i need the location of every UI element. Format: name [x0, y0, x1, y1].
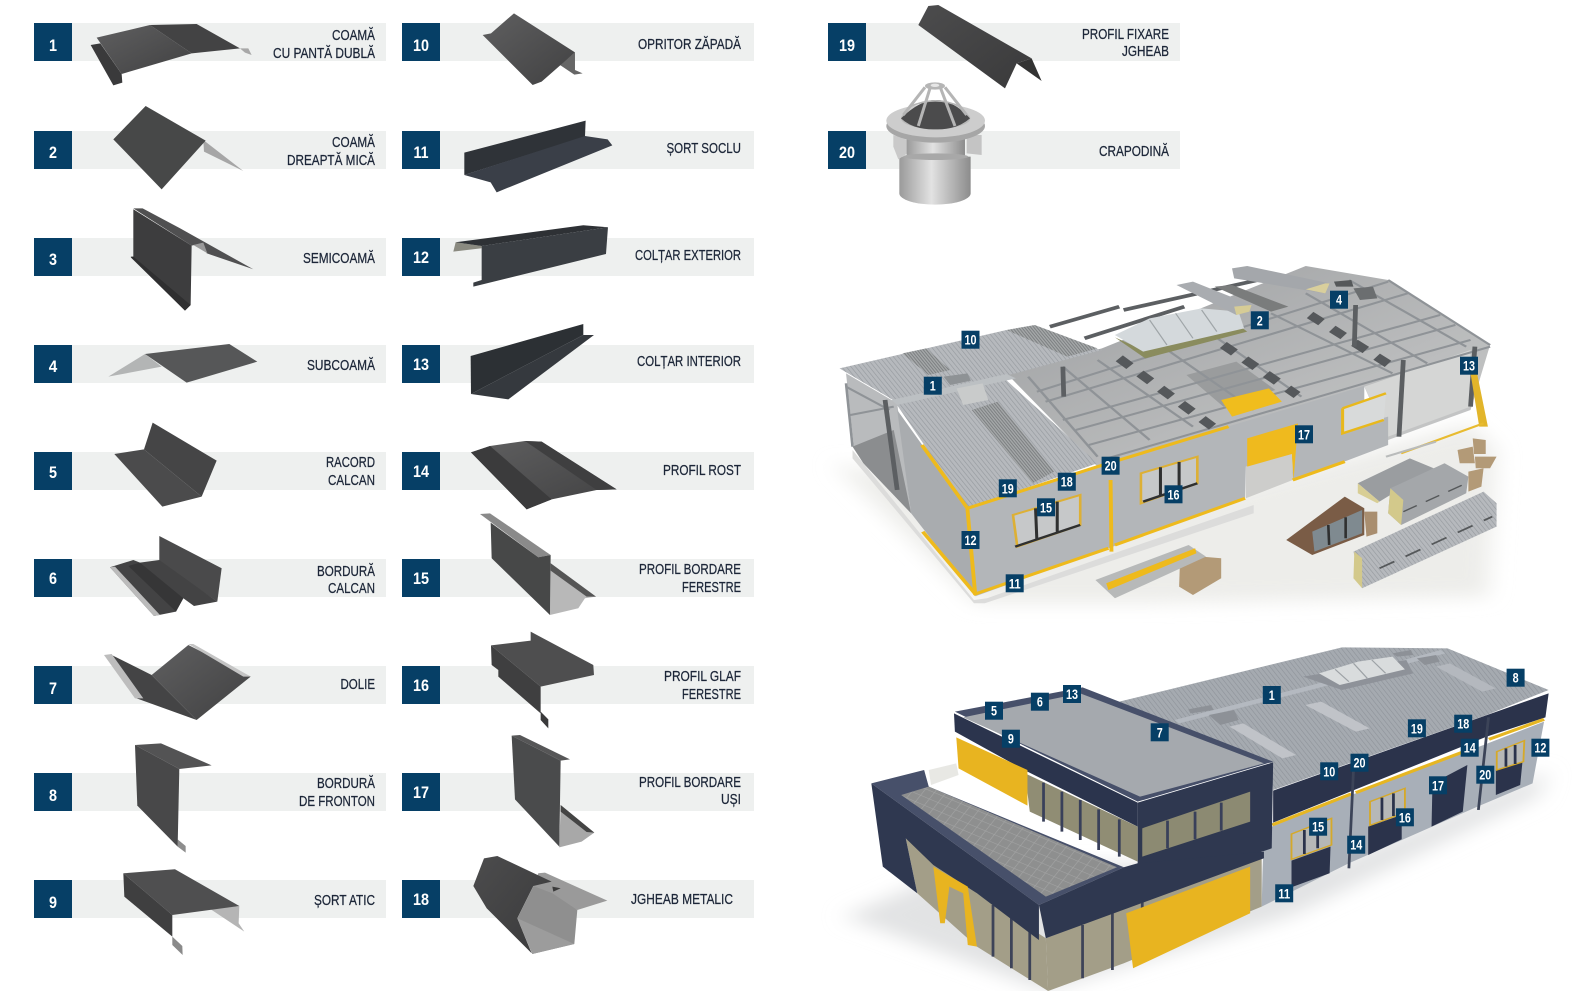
building 2 number badges: 19: [1411, 720, 1423, 736]
row 8: bordură de fronton: [34, 743, 386, 853]
building 1 number badges: 10: [964, 332, 977, 348]
badge 3: [34, 238, 72, 276]
building 2 number badges: 13: [1066, 686, 1078, 702]
icon 3: [131, 208, 253, 311]
icon 20: [886, 82, 985, 205]
badge 4: 4: [49, 358, 58, 376]
icon 12: [453, 225, 608, 287]
building 1 number badges: [924, 291, 1478, 592]
row 12: colțar exterior: [402, 225, 754, 287]
icon 15: [480, 513, 596, 615]
badge 5: [34, 452, 72, 490]
icon 8: [135, 743, 212, 853]
badge 18: 18: [413, 891, 429, 909]
building 1 number badges: 17: [1298, 426, 1310, 442]
building 2 number badges: 1: [1269, 687, 1275, 703]
badge 2: 2: [49, 144, 57, 162]
badge 13: 13: [413, 356, 429, 374]
label 15: [639, 562, 741, 596]
badge 14: [402, 452, 440, 490]
wall windows: [1291, 741, 1524, 859]
label 8: [299, 775, 375, 810]
label 18: JGHEAB METALIC: [631, 892, 733, 908]
building 1 number badges: 2: [1257, 312, 1263, 328]
building 2 number badges: 16: [1399, 809, 1411, 825]
label 15: PROFIL BORDARE: [639, 562, 741, 578]
label 3: SEMICOAMĂ: [303, 250, 375, 267]
building 1 number badges: 19: [1002, 480, 1014, 496]
label 5: [326, 455, 375, 489]
building 2: finished building with dark and yellow cladding: [844, 647, 1549, 991]
icon 16: [491, 632, 594, 728]
badge 16: 16: [413, 677, 429, 695]
materials: framed windows: [1286, 497, 1377, 555]
window opening with yellow sill: [1343, 393, 1386, 433]
badge 9: 9: [49, 894, 57, 912]
building 1 number badges: 13: [1463, 358, 1475, 374]
row 15: profil bordare ferestre: [402, 513, 754, 615]
roof skylight: [1303, 657, 1413, 690]
building 2 number badges: 12: [1534, 740, 1547, 756]
rear roof: [1119, 647, 1549, 790]
large yellow panel: [1126, 867, 1250, 968]
badge 17: 17: [413, 784, 429, 802]
dark door and window panels: [1291, 762, 1522, 887]
terrace railing: [881, 763, 959, 795]
row 18: jgheab metalic: [402, 856, 754, 954]
icon 18: [473, 856, 607, 954]
yellow wall trim: [922, 427, 1345, 595]
icon 2: [113, 106, 243, 189]
icon 14: [471, 441, 617, 509]
badge 1: 1: [49, 37, 57, 55]
row 7: dolie: [34, 644, 386, 720]
label 6: BORDURĂ: [317, 563, 375, 580]
label 8: BORDURĂ: [317, 775, 375, 792]
row 3: semicoamă: [34, 208, 386, 311]
materials: cardboard boxes: [1179, 438, 1497, 595]
building 2 number badges: [985, 669, 1549, 902]
icon 6: [110, 536, 222, 616]
label 6: [317, 563, 375, 597]
label 9: ȘORT ATIC: [314, 893, 375, 909]
icon 17: [512, 735, 594, 847]
downpipes: [1349, 717, 1488, 868]
label 1: CU PANTĂ DUBLĂ: [273, 45, 375, 62]
garage door: [1247, 423, 1298, 480]
badge 10: 10: [413, 37, 429, 55]
icon 7: [104, 644, 251, 720]
building 2 number badges: 14: [1350, 837, 1362, 853]
badge 20: 20: [839, 144, 855, 162]
label 1: [273, 27, 375, 62]
badge 11: 11: [414, 144, 428, 162]
label 19: [1082, 27, 1169, 60]
roof panels with ribs: [840, 325, 1102, 508]
upper volume: [954, 687, 1273, 893]
building 2 number badges: 18: [1457, 716, 1469, 732]
icon 1: [91, 24, 252, 85]
badge 3: 3: [49, 251, 57, 269]
label 5: RACORD: [326, 455, 375, 471]
label 10: OPRITOR ZĂPADĂ: [638, 36, 741, 53]
building 2 number badges: 9: [1008, 731, 1014, 747]
ground-floor glazing: [906, 838, 1262, 991]
roof vents: [1188, 650, 1440, 725]
icon 5: [114, 423, 217, 507]
badge 19: 19: [839, 37, 855, 55]
icon 11: [464, 121, 612, 192]
icon 4: [108, 344, 257, 383]
label 16: FERESTRE: [682, 687, 741, 703]
building 1 number badges: 20: [1105, 458, 1117, 474]
label 2: DREAPTĂ MICĂ: [287, 152, 375, 169]
badge 14: 14: [413, 463, 430, 481]
label 17: [639, 775, 741, 808]
badge 7: 7: [49, 680, 57, 698]
icon 13: [471, 324, 594, 399]
label 15: FERESTRE: [682, 580, 741, 596]
building 2 number badges: 7: [1157, 724, 1163, 740]
badge 12: [402, 238, 440, 276]
skylight: [1115, 308, 1247, 358]
badge 5: 5: [49, 464, 57, 482]
row 20: crapodină: [828, 82, 1180, 205]
building walls: [897, 386, 1388, 597]
label 19: PROFIL FIXARE: [1082, 27, 1169, 43]
icon 9: [123, 869, 244, 955]
row 11: șort soclu: [402, 121, 754, 192]
building 2 number badges: 20: [1479, 767, 1491, 783]
row 10: opritor zăpadă: [402, 13, 754, 85]
label 5: CALCAN: [328, 473, 375, 489]
row 6: bordură calcan: [34, 536, 386, 616]
interior floor and open frame: [846, 266, 1490, 513]
light plinth around the walls: [853, 450, 1254, 603]
row 17: profil bordare uși: [402, 735, 754, 847]
badge 8: 8: [49, 787, 57, 805]
materials: panel stacks: [1353, 458, 1497, 588]
lower wall: [1262, 722, 1544, 907]
materials: yellow profiles: [1095, 545, 1206, 598]
label 7: DOLIE: [340, 677, 375, 693]
yellow entrance frame: [933, 867, 977, 947]
label 1: COAMĂ: [332, 27, 375, 44]
label 2: [287, 134, 375, 169]
badge 10: [402, 23, 440, 61]
row 5: racord calcan: [34, 423, 386, 507]
label 6: CALCAN: [328, 581, 375, 597]
building 2 number badges: 8: [1513, 670, 1519, 686]
badge 18: [402, 880, 440, 918]
badge 16: [402, 666, 440, 704]
windows: [1013, 457, 1197, 547]
label 4: SUBCOAMĂ: [307, 357, 375, 374]
row 9: șort atic: [34, 869, 386, 955]
badge 8: [34, 773, 72, 811]
panel stacks on the roof: [1177, 266, 1377, 315]
icon 19: [918, 5, 1042, 88]
row 16: profil glaf ferestre: [402, 632, 754, 728]
badge 12: 12: [413, 249, 429, 267]
building 1 number badges: 18: [1061, 474, 1073, 490]
building 1 number badges: 4: [1336, 292, 1342, 308]
badge 4: [34, 345, 72, 383]
badge 20: [828, 131, 866, 169]
row 13: colțar interior: [402, 324, 754, 399]
badge 13: [402, 345, 440, 383]
badge 1: [34, 23, 72, 61]
label 14: PROFIL ROST: [663, 463, 741, 479]
badge 15: [402, 559, 440, 597]
badge 9: [34, 880, 72, 918]
row 4: subcoamă: [34, 344, 386, 383]
label 8: DE FRONTON: [299, 794, 375, 810]
building 2 number badges: 11: [1278, 885, 1290, 901]
lower volume: [871, 770, 1264, 940]
label 17: PROFIL BORDARE: [639, 775, 741, 791]
dark upper facade: [1273, 693, 1549, 823]
badge 19: [828, 23, 866, 61]
label 17: UȘI: [721, 792, 741, 808]
badge 6: [34, 559, 72, 597]
badge 2: [34, 131, 72, 169]
building 1 number badges: 1: [930, 378, 936, 394]
building 2 number badges: 15: [1312, 819, 1324, 835]
label 12: COLȚAR EXTERIOR: [635, 248, 741, 264]
label 16: PROFIL GLAF: [664, 669, 741, 685]
building 2 number badges: 5: [991, 703, 997, 719]
badge 6: 6: [49, 570, 57, 588]
label 19: JGHEAB: [1122, 44, 1169, 60]
building 1 number badges: 11: [1009, 575, 1021, 591]
row 1: coamă cu pantă dublă: [34, 23, 386, 85]
badge 17: [402, 773, 440, 811]
building 2 number badges: 17: [1432, 777, 1444, 793]
row 14: profil rost: [402, 441, 754, 509]
icon 10: [483, 13, 583, 85]
label 20: CRAPODINĂ: [1099, 143, 1169, 160]
yellow upper panel: [956, 737, 1027, 806]
badge 7: [34, 666, 72, 704]
badge 11: [402, 131, 440, 169]
label 16: [664, 669, 741, 703]
building 2 number badges: 14: [1464, 740, 1476, 756]
building 1 number badges: 12: [964, 532, 977, 548]
building 2 number badges: 20: [1354, 755, 1366, 771]
building 1 number badges: 16: [1168, 486, 1180, 502]
badge 15: 15: [413, 570, 429, 588]
building 2 number badges: 6: [1037, 694, 1043, 710]
label 2: COAMĂ: [332, 134, 375, 151]
building 1: construction under way with materials: [833, 266, 1497, 603]
yellow band: [1272, 719, 1544, 825]
building 1 number badges: 15: [1040, 499, 1052, 515]
row 2: coamă dreaptă mică: [34, 106, 386, 189]
building 2 number badges: 10: [1323, 763, 1335, 779]
label 13: COLȚAR INTERIOR: [637, 354, 741, 370]
row 19: profil fixare jgheab: [828, 5, 1180, 88]
label 11: ȘORT SOCLU: [666, 141, 741, 157]
